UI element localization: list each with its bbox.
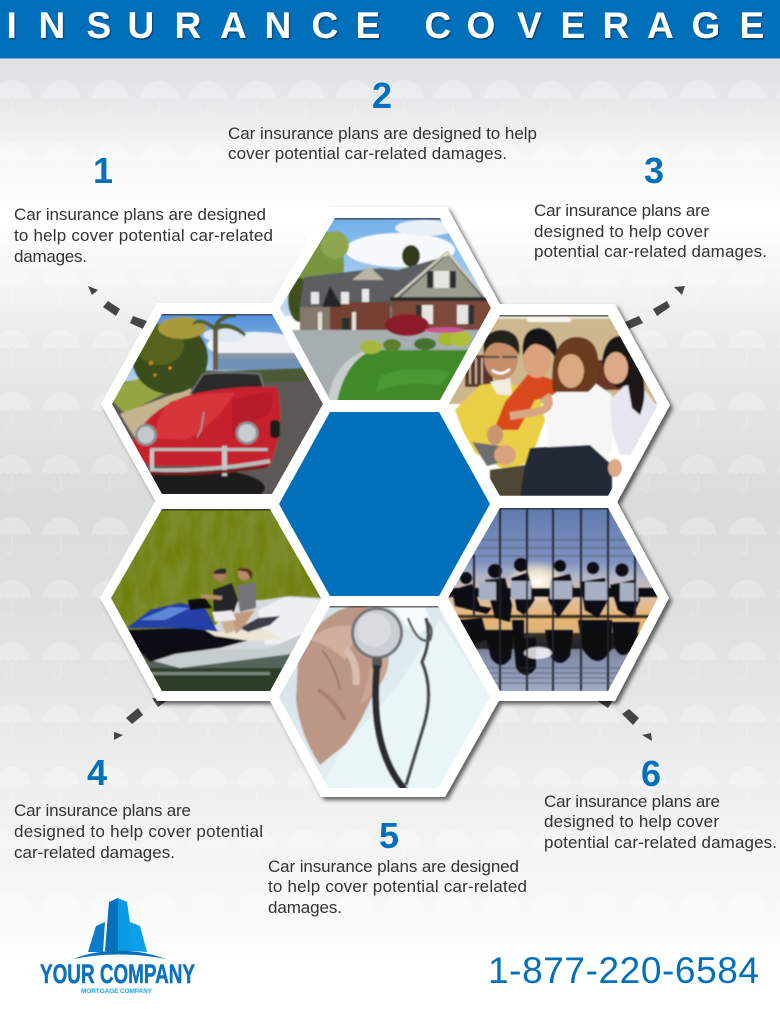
- step 1: Car insurance plans are designed: [14, 205, 266, 224]
- step 1: damages.: [14, 247, 87, 266]
- photo: doctor with stethoscope: [277, 604, 492, 790]
- step 6: Car insurance plans are: [544, 792, 720, 811]
- step 2: 2: [372, 75, 392, 116]
- photo: suburban house: [278, 216, 500, 402]
- dashed arrow 4: [114, 698, 168, 740]
- photo: boardroom silhouettes: [446, 506, 661, 693]
- step 5: to help cover potential car-related: [268, 877, 527, 896]
- step 5: damages.: [268, 898, 342, 917]
- step 1: [14, 150, 273, 266]
- dashed arrow 6: [596, 700, 652, 741]
- logo name: YOUR COMPANY: [40, 959, 195, 989]
- title: INSURANCE COVERAGE: [6, 5, 764, 46]
- center blue hexagon: [279, 412, 490, 596]
- step 4: 4: [87, 752, 107, 793]
- step 5: 5: [379, 815, 399, 856]
- step 5: Car insurance plans are designed: [268, 857, 519, 876]
- step 4: [14, 752, 263, 862]
- dashed arrow 1: [88, 286, 147, 329]
- step 3: designed to help cover: [534, 222, 709, 241]
- step 1: 1: [93, 150, 113, 191]
- step 6: designed to help cover: [544, 812, 719, 831]
- photo: jet ski on water: [109, 507, 323, 697]
- step 6: potential car-related damages.: [544, 833, 777, 852]
- step 6: 6: [641, 753, 661, 794]
- step 2: cover potential car-related damages.: [228, 144, 507, 163]
- logo tagline: MORTGAGE COMPANY: [81, 988, 153, 995]
- company logo: [40, 898, 195, 995]
- step 3: potential car-related damages.: [534, 242, 767, 261]
- phone number: 1-877-220-6584: [488, 950, 759, 991]
- dashed arrow 3: [625, 286, 685, 329]
- step 2: [228, 75, 537, 163]
- step 1: to help cover potential car-related: [14, 226, 273, 245]
- step 5: [268, 815, 527, 917]
- step 3: 3: [644, 150, 664, 191]
- step 3: Car insurance plans are: [534, 201, 710, 220]
- step 2: Car insurance plans are designed to help: [228, 124, 537, 143]
- header banner: [0, 0, 780, 58]
- step 6: [544, 753, 777, 852]
- step 4: Car insurance plans are: [14, 801, 191, 820]
- photo: red convertible car: [110, 312, 325, 508]
- photo: smiling family: [446, 314, 661, 496]
- white hexagon frames: [100, 207, 670, 797]
- logo icon: buildings: [73, 898, 166, 959]
- step 4: designed to help cover potential: [14, 822, 263, 841]
- step 4: car-related damages.: [14, 843, 175, 862]
- step 3: [534, 150, 767, 261]
